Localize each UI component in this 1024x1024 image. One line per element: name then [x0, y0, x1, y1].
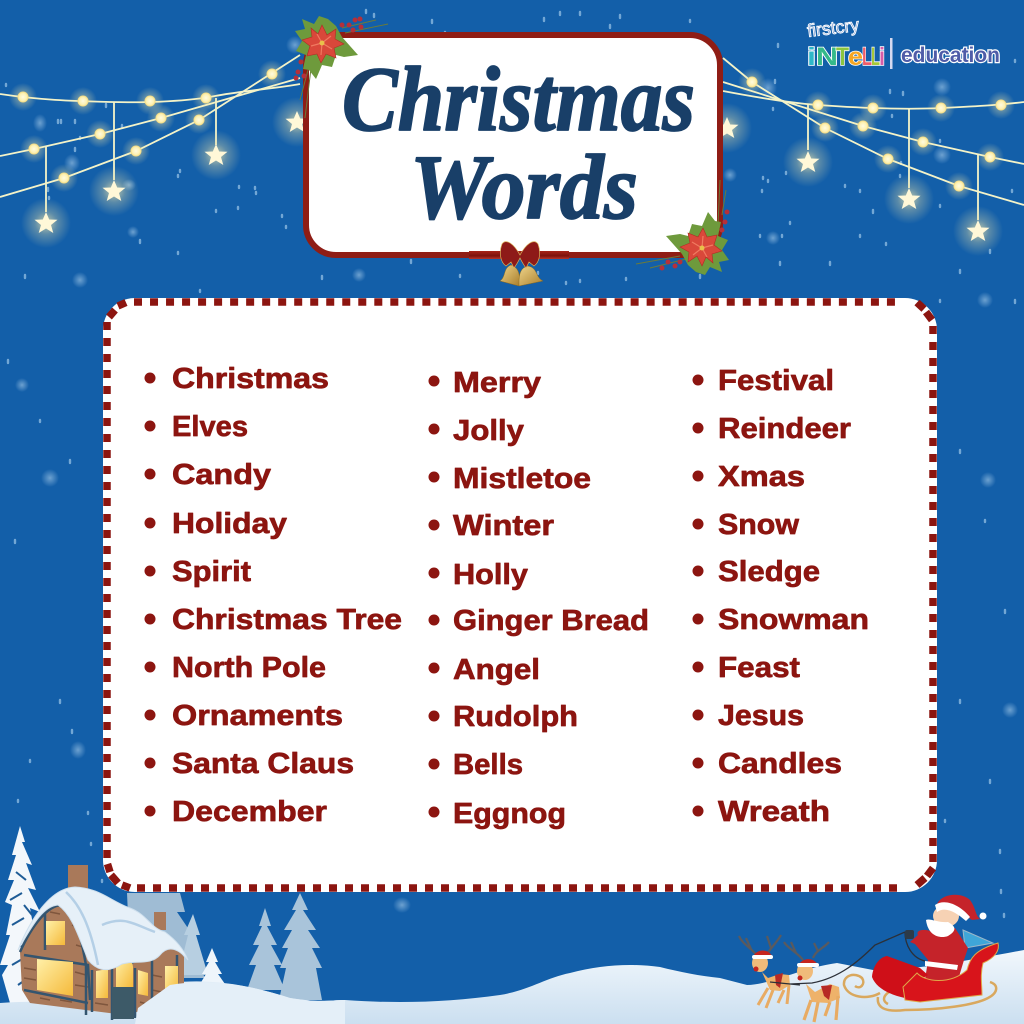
santa sleigh: [844, 895, 998, 1011]
column 1: Santa Claus: [172, 748, 354, 780]
snowy pine: left: [0, 826, 40, 1003]
house: [18, 865, 188, 1020]
logo: intelli wordmark: L: [862, 43, 872, 71]
column 1: North Pole: [172, 652, 326, 684]
windows: [37, 921, 178, 998]
column 2: Rudolph: [453, 701, 578, 733]
reins: [770, 932, 925, 985]
logo: intelli wordmark: i: [807, 43, 816, 71]
reindeer: first: [739, 935, 790, 1008]
bells: [500, 265, 543, 286]
logo: intelli wordmark: T: [836, 43, 849, 71]
bow: [500, 242, 540, 268]
column 3: Feast: [718, 652, 800, 684]
dashed border: [107, 302, 933, 888]
logo: intelli wordmark: L: [871, 43, 880, 71]
snowy pine: small: [200, 948, 225, 984]
sleigh front: [872, 956, 928, 998]
logo: [806, 15, 1000, 71]
column 1: Christmas Tree: [172, 604, 402, 636]
column 2: Holly: [453, 559, 528, 591]
title: [342, 48, 695, 238]
column 3: Wreath: [718, 796, 830, 828]
column 2: Angel: [453, 654, 540, 686]
sleigh runner: [844, 975, 996, 1011]
logo: intelli wordmark: N: [816, 43, 838, 71]
column 3: Xmas: [718, 461, 805, 493]
chimneys: [68, 865, 166, 930]
reindeer: second: [784, 942, 840, 1022]
column 1: Elves: [172, 411, 248, 443]
santa body: [910, 928, 968, 980]
string lights: left: [0, 55, 322, 248]
column 2: Winter: [453, 510, 554, 542]
background pine trees: [127, 893, 322, 1000]
column 2: [428, 367, 649, 830]
logo: intelli wordmark: e: [848, 43, 863, 71]
column 2: Jolly: [453, 415, 524, 447]
word list panel: [103, 298, 937, 892]
decoration: bow and bells: [469, 242, 569, 286]
door: [112, 987, 134, 1019]
title: Words: [410, 136, 638, 238]
column 1: December: [172, 796, 327, 828]
column 1: Spirit: [172, 556, 251, 588]
santa hat: [937, 895, 980, 920]
column 2: Merry: [453, 367, 541, 399]
decoration: poinsettia top-left: [294, 16, 388, 118]
column 2: Mistletoe: [453, 463, 591, 495]
decoration: poinsettia bottom-right: [636, 180, 730, 275]
column 3: Snow: [718, 509, 799, 541]
column 3: Sledge: [718, 556, 820, 588]
column 2: Bells: [453, 749, 523, 781]
logo: firstcry wordmark: firstcry: [806, 15, 860, 41]
santa head: [933, 905, 959, 927]
column 1: [144, 363, 402, 828]
column 1: Holiday: [172, 508, 287, 540]
sack: [963, 930, 993, 948]
logo: intelli wordmark: [807, 43, 885, 71]
column 2: Eggnog: [453, 798, 566, 830]
title panel: [306, 35, 720, 255]
column 3: Candles: [718, 748, 842, 780]
column 2: Ginger Bread: [453, 605, 649, 637]
front snow drift: [135, 982, 345, 1024]
walls: [20, 905, 184, 1015]
column 3: Snowman: [718, 604, 869, 636]
logo: intelli wordmark: i: [879, 43, 885, 71]
column 3: [692, 365, 869, 828]
sleigh body: [903, 943, 998, 1002]
title: Christmas: [342, 48, 695, 150]
column 1: Ornaments: [172, 700, 343, 732]
ground: snow: [0, 950, 1024, 1024]
column 3: Jesus: [718, 700, 804, 732]
logo: education wordmark: education: [901, 44, 1000, 67]
column 3: Reindeer: [718, 413, 851, 445]
string lights: right: [702, 58, 1024, 256]
column 3: Festival: [718, 365, 834, 397]
stone texture: [24, 912, 162, 1005]
snowy roof: [18, 887, 188, 970]
column 1: Candy: [172, 459, 271, 491]
column 1: Christmas: [172, 363, 329, 395]
